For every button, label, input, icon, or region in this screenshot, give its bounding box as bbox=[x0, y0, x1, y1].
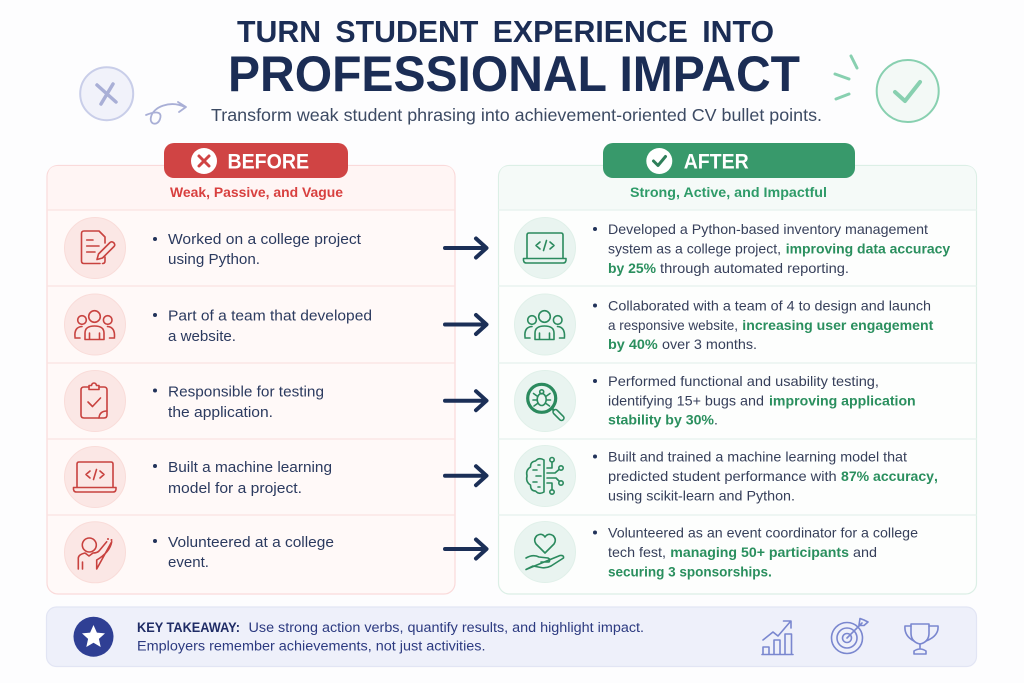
after row 3: identifying 15+ bugs and bbox=[608, 393, 764, 409]
after row 3 bbox=[514, 370, 916, 432]
after subheading: Strong, Active, and Impactful bbox=[630, 185, 827, 200]
panel: after bbox=[498, 143, 977, 594]
before row 2 bbox=[64, 294, 372, 355]
title bbox=[228, 15, 800, 102]
icon: growth chart bbox=[762, 621, 793, 654]
icon: volunteer raising hand bbox=[64, 522, 126, 583]
panel: before bbox=[47, 143, 455, 594]
arrow: row 2 bbox=[445, 315, 486, 334]
before row 3: Responsible for testing bbox=[168, 384, 324, 401]
before row 3 bbox=[64, 370, 324, 432]
after row 5: . bbox=[768, 564, 772, 580]
after row 2: a responsive website, bbox=[608, 317, 738, 333]
after row 1: Developed a Python-based inventory management bbox=[608, 221, 928, 237]
before row 5: event. bbox=[168, 554, 209, 571]
before row 1: using Python. bbox=[168, 251, 260, 268]
subtitle: Transform weak student phrasing into achievement-oriented CV bullet points. bbox=[211, 105, 822, 125]
before row 2: Part of a team that developed bbox=[168, 308, 372, 324]
after row 4: using scikit-learn and Python. bbox=[608, 488, 795, 504]
after row 2 bbox=[514, 294, 934, 355]
icon: magnifier with bug bbox=[514, 370, 576, 432]
title: TURN STUDENT EXPERIENCE INTO bbox=[237, 15, 774, 49]
before row 5: Volunteered at a college bbox=[168, 534, 334, 551]
icon: laptop code bbox=[514, 218, 576, 278]
after row 3: . bbox=[714, 412, 718, 428]
after row 2: by 40% bbox=[608, 336, 658, 352]
icon: trophy bbox=[905, 624, 938, 654]
after row 2: over 3 months. bbox=[662, 336, 757, 352]
after row 4: 87% accuracy bbox=[841, 468, 934, 484]
icon: decorative cross circle bbox=[80, 67, 133, 120]
icon: target bbox=[832, 618, 868, 654]
before badge bbox=[164, 143, 348, 178]
after row 4: , bbox=[934, 468, 938, 484]
arrow: row 5 bbox=[445, 540, 486, 558]
after row 1: by 25% bbox=[608, 260, 657, 276]
before row 2: a website. bbox=[168, 328, 236, 345]
icon: team bbox=[64, 294, 126, 355]
panel: key takeaway bbox=[46, 607, 976, 666]
after row 3: improving application bbox=[769, 393, 916, 409]
after row 2: Collaborated with a team of 4 to design and launch bbox=[608, 298, 931, 314]
icon: team bbox=[514, 294, 576, 355]
after row 4: Built and trained a machine learning model that bbox=[608, 449, 907, 465]
after row 4 bbox=[514, 446, 938, 506]
icon: star badge bbox=[74, 617, 114, 657]
icon: hand holding heart bbox=[514, 522, 576, 582]
after row 5 bbox=[514, 522, 918, 582]
before row 5 bbox=[64, 522, 334, 583]
after row 5: securing 3 sponsorships bbox=[608, 564, 768, 580]
after row 4: predicted student performance with bbox=[608, 468, 837, 484]
after badge bbox=[603, 143, 855, 178]
after row 2: increasing user engagement bbox=[742, 317, 934, 333]
title: PROFESSIONAL IMPACT bbox=[228, 46, 800, 102]
after row 5: managing 50+ participants bbox=[670, 544, 849, 560]
after row 5: Volunteered as an event coordinator for a college bbox=[608, 525, 918, 541]
icon: circuit brain bbox=[514, 446, 576, 506]
takeaway text: KEY TAKEAWAY: bbox=[137, 620, 240, 635]
before row 3: the application. bbox=[168, 404, 273, 421]
takeaway text: Employers remember achievements, not just activities. bbox=[137, 639, 486, 654]
icon: document and pencil bbox=[64, 218, 126, 278]
arrow: row 4 bbox=[445, 466, 486, 485]
before badge: BEFORE bbox=[228, 150, 309, 174]
after row 5: and bbox=[853, 544, 877, 560]
after row 1: system as a college project, bbox=[608, 241, 781, 257]
takeaway text bbox=[137, 620, 644, 654]
after row 3: stability by 30% bbox=[608, 412, 715, 428]
after row 5: tech fest, bbox=[608, 544, 666, 560]
after row 3: Performed functional and usability testing, bbox=[608, 373, 879, 389]
takeaway text: Use strong action verbs, quantify results, and highlight impact. bbox=[248, 620, 644, 635]
icon: clipboard bbox=[64, 370, 126, 432]
before row 1: Worked on a college project bbox=[168, 231, 362, 248]
before row 4 bbox=[64, 446, 332, 508]
after row 1: improving data accuracy bbox=[786, 241, 950, 257]
before row 1 bbox=[64, 218, 362, 278]
before row 4: model for a project. bbox=[168, 480, 302, 497]
after badge: AFTER bbox=[684, 150, 749, 174]
icon: curly arrow bbox=[146, 102, 186, 124]
after row 1 bbox=[514, 218, 950, 278]
icon: decorative check circle bbox=[835, 56, 939, 122]
after row 1: through automated reporting. bbox=[660, 260, 849, 276]
icon: laptop code bbox=[64, 446, 126, 508]
arrow: row 3 bbox=[445, 391, 486, 410]
arrow: row 1 bbox=[445, 238, 486, 258]
before subheading: Weak, Passive, and Vague bbox=[170, 185, 344, 200]
before row 4: Built a machine learning bbox=[168, 459, 332, 476]
